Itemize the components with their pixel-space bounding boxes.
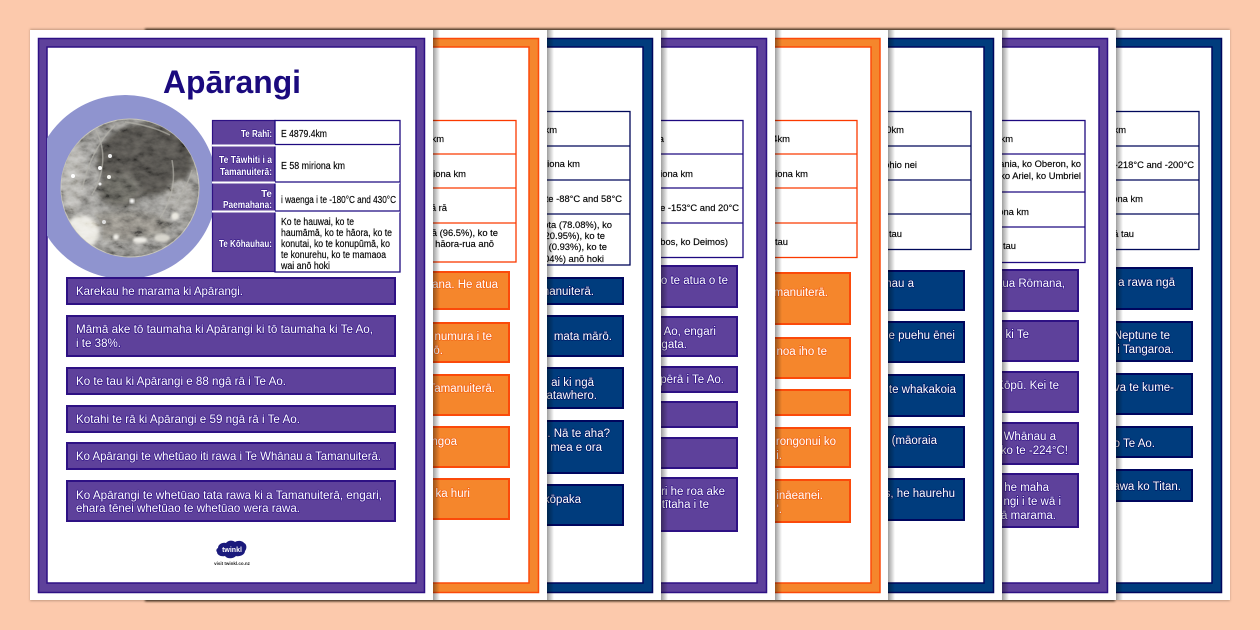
fact boxes: . Nā te aha? <box>547 428 610 440</box>
fact boxes: numura i te <box>434 331 492 343</box>
fact boxes: pērā i Te Ao. <box>660 374 724 386</box>
fact boxes: awa ko Titan. <box>1113 481 1181 493</box>
twinkl logo: twinkl <box>222 547 242 554</box>
fact boxes: Ko te tau ki Apārangi e 88 ngā rā i Te Ao. <box>76 374 286 388</box>
data table: E 58 miriona km <box>281 161 345 172</box>
fact boxes <box>882 271 964 520</box>
title: Apārangi <box>163 64 301 100</box>
fact boxes <box>540 278 623 525</box>
fact boxes: Kotahi te rā ki Apārangi e 59 ngā rā i Te Ao. <box>76 412 300 426</box>
fact boxes: kōpaka <box>544 494 582 506</box>
table: 0km <box>886 124 904 135</box>
fact boxes: ā marama. <box>1001 510 1056 522</box>
sheet 4: purple <box>650 30 775 600</box>
table: km <box>432 133 444 144</box>
table: hobos, ko Deimos) <box>650 236 728 247</box>
table: i te -88°C and 58°C <box>541 193 622 204</box>
table <box>427 120 516 262</box>
fact boxes: tua Rōmana, <box>999 278 1065 290</box>
table: te -218°C and -200°C <box>1104 159 1194 170</box>
data table: Te Tāwhiti i a <box>219 155 272 166</box>
fact boxes: ehara tēnei whetūao te whetūao wera rawa. <box>76 501 300 515</box>
table: ko Ariel, ko Umbriel <box>1000 170 1081 181</box>
table: tau <box>889 228 902 239</box>
fact boxes: ai ki ngā <box>551 377 595 389</box>
fact boxes: Kōpū. Kei te <box>996 380 1059 392</box>
fact boxes: ināeanei. <box>776 490 823 502</box>
fact boxes: ngoa <box>431 436 458 448</box>
fact boxes: o Te Ao. <box>1114 438 1155 450</box>
table: 04%) anō hoki <box>544 253 604 264</box>
fact boxes: va te kume- <box>1114 382 1174 394</box>
table: rā (96.5%), ko te <box>429 227 498 238</box>
planet illustration <box>47 95 212 277</box>
fact boxes: ō. <box>433 345 443 357</box>
table: tau <box>1003 240 1016 251</box>
table: ā tau <box>1113 228 1134 239</box>
fact boxes: ana. He atua <box>432 279 499 291</box>
fact boxes: tītaha i te <box>662 499 709 511</box>
fact boxes: mata mārō. <box>554 331 612 343</box>
fact boxes: Ao, engari <box>664 326 716 338</box>
data table: E 4879.4km <box>281 129 327 140</box>
table <box>1116 110 1200 250</box>
fact boxes <box>67 278 395 521</box>
fact boxes: gata. <box>661 339 687 351</box>
table: Titania, ko Oberon, ko <box>989 158 1081 169</box>
fact boxes: mea e ora <box>550 442 603 454</box>
twinkl logo: visit twinkl.co.nz <box>214 561 251 566</box>
fact boxes: i. <box>776 450 782 462</box>
fact boxes: ki Te <box>1006 329 1029 341</box>
fact boxes: o te atua o te <box>661 275 728 287</box>
data table: i waenga i te -180°C and 430°C <box>281 195 396 206</box>
fact boxes: te whakakoia <box>889 384 957 396</box>
data table: haumāmā, ko te hāora, ko te <box>281 228 392 239</box>
table: riona km <box>430 168 466 179</box>
table: km <box>1114 124 1126 135</box>
fact boxes <box>769 273 850 522</box>
fact boxes: ka huri <box>435 488 470 500</box>
sheet 7: purple <box>1002 30 1116 600</box>
table: i te -153°C and 20°C <box>653 202 739 213</box>
table: ota (78.08%), ko <box>543 219 612 230</box>
table: riona km <box>657 168 693 179</box>
sheet 2: orange <box>427 30 547 600</box>
fact boxes: nau a <box>885 278 915 290</box>
fact boxes: i te 38%. <box>76 336 121 350</box>
twinkl logo <box>214 541 251 566</box>
fact boxes: Ko Apārangi te whetūao tata rawa ki a Tamanuiterā, engari, <box>76 488 382 502</box>
table: ā rā <box>431 202 448 213</box>
table: riona km <box>544 158 580 169</box>
table: ōhio nei <box>884 159 917 170</box>
fact boxes: rongonui ko <box>776 436 836 448</box>
table <box>650 120 743 258</box>
data table: Tamanuiterā: <box>220 167 272 178</box>
sheet 5: orange <box>769 30 888 600</box>
data table: konutai, ko te konupūmā, ko <box>281 239 390 250</box>
table: 4km <box>772 133 790 144</box>
fact boxes: Ko Apārangi te whetūao iti rawa i Te Whānau a Tamanuiterā. <box>76 449 381 463</box>
fact boxes: Neptune te <box>1114 330 1170 342</box>
table <box>769 120 857 258</box>
data table: te konurehu, ko te mamaoa <box>281 250 386 261</box>
table: a hāora-rua anō <box>427 238 494 249</box>
data table <box>212 120 400 272</box>
sheet 6: navy <box>882 30 1002 600</box>
fact boxes: ri he roa ake <box>661 486 725 498</box>
fact boxes: Whānau a <box>1004 431 1057 443</box>
table: tau <box>775 236 788 247</box>
fact boxes <box>427 272 509 519</box>
fact boxes: Māmā ake tō taumaha ki Apārangi ki tō taumaha ki Te Ao, <box>76 322 373 336</box>
table: i (0.93%), ko te <box>544 241 607 252</box>
fact boxes <box>655 266 737 531</box>
table: riona km <box>772 168 808 179</box>
table: ona km <box>998 206 1029 217</box>
table: km <box>544 124 557 135</box>
data table: Te <box>261 189 272 200</box>
fact boxes: e puehu ēnei <box>888 330 955 342</box>
data table: Paemahana: <box>223 200 272 211</box>
table <box>541 112 630 265</box>
fact boxes: i Tangaroa. <box>1117 344 1174 356</box>
fact boxes: noa iho te <box>776 346 827 358</box>
table <box>1002 120 1086 264</box>
fact boxes: atawhero. <box>546 390 597 402</box>
data table: Te Kōhauhau: <box>219 239 272 250</box>
fact boxes: s, he haurehu <box>885 488 955 500</box>
table: (20.95%), ko te <box>541 230 605 241</box>
fact boxes: a rawa ngā <box>1118 277 1176 289</box>
fact boxes: ngi i te wā i <box>1003 496 1061 508</box>
fact boxes <box>996 270 1078 527</box>
table <box>882 112 971 250</box>
fact boxes: '. <box>777 504 782 516</box>
sheet 8: navy <box>1104 30 1230 600</box>
table: a <box>659 133 665 144</box>
data table: Ko te hauwai, ko te <box>281 217 354 228</box>
sheet 1: Apārangi poster <box>30 30 433 600</box>
fact boxes <box>1110 268 1192 501</box>
sheet 3: navy <box>540 30 661 600</box>
fact boxes: Tamanuiterā. <box>429 383 495 395</box>
fact boxes: he maha <box>1004 482 1050 494</box>
data table: Te Rahī: <box>241 129 272 140</box>
fact boxes: manuiterā. <box>774 287 828 299</box>
fact boxes: (māoraia <box>892 435 938 447</box>
fact boxes: ko te -224°C! <box>1001 445 1068 457</box>
table: km <box>1000 133 1013 144</box>
fact boxes: manuiterā. <box>540 286 594 298</box>
data table: wai anō hoki <box>280 261 330 272</box>
table: ona km <box>1112 193 1143 204</box>
fact boxes: Karekau he marama ki Apārangi. <box>76 284 243 298</box>
